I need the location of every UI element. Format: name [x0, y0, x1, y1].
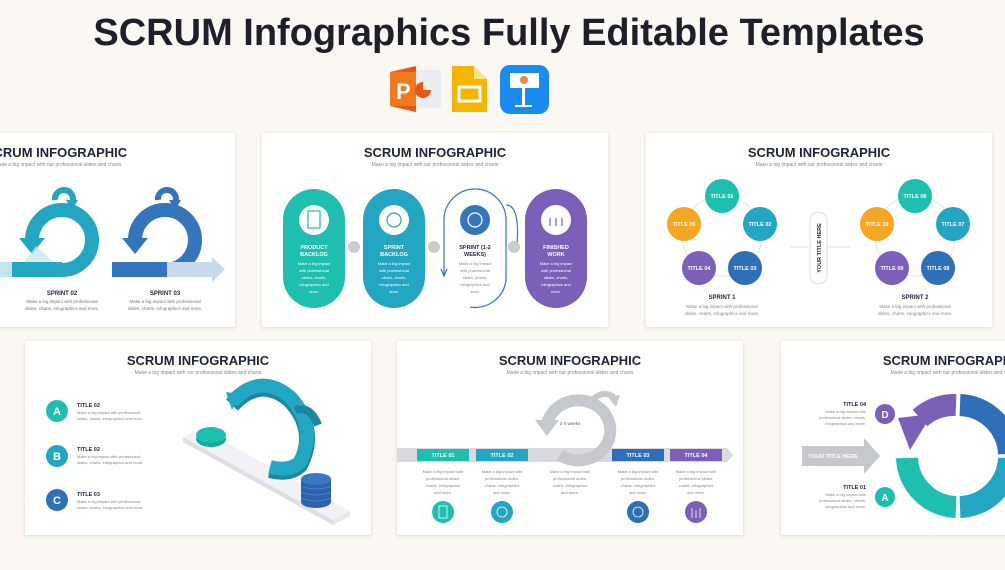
- icon: google slides: [452, 66, 487, 112]
- panel: ring: TITLE 01: [843, 485, 866, 491]
- list A B C: Make a big impact with professional: [77, 410, 140, 415]
- panel: sprint cycles: slides, charts, infographics and more.: [878, 311, 952, 316]
- panel: sprint cycles: Make a big impact with professional: [879, 304, 951, 309]
- cycle: sprint 1: TITLE 05: [673, 222, 695, 228]
- cycle: sprint 2: TITLE 06: [904, 194, 926, 200]
- descriptions: and more.: [561, 490, 579, 495]
- cycle: sprint 2: TITLE 10: [866, 222, 888, 228]
- panel: ring: [781, 341, 1005, 535]
- descriptions: and more.: [629, 490, 647, 495]
- pill: sprint outline: Make a big impact: [459, 261, 492, 266]
- labels: TITLE 02: [491, 453, 513, 459]
- descriptions: Make a big impact with: [482, 469, 522, 474]
- panel: sprint arrows: slides, charts, infographics and more.: [128, 306, 202, 311]
- panel: sprint cycles: slides, charts, infographics and more.: [685, 311, 759, 316]
- descriptions: professional slides,: [485, 476, 519, 481]
- descriptions: Make a big impact with: [423, 469, 463, 474]
- pill: sprint backlog: SPRINT: [384, 245, 405, 251]
- list A B C: Make a big impact with professional: [77, 454, 140, 459]
- panel: isometric: SCRUM INFOGRAPHIC: [127, 353, 270, 368]
- panel: timeline: Make a big impact with our professional slides and charts: [507, 370, 634, 376]
- panel: sprint arrows: Make a big impact with professional: [26, 299, 98, 304]
- pill: finished work: infographics and: [541, 282, 571, 287]
- pill: sprint backlog: with professional: [379, 268, 409, 273]
- list A B C: TITLE 02: [77, 447, 100, 453]
- pill: product backlog: slides, charts,: [302, 275, 326, 280]
- panel: sprint cycles: SPRINT 1: [708, 295, 736, 301]
- panel: ring: Make a big impact with: [825, 409, 866, 414]
- cycle: sprint 1: TITLE 02: [749, 222, 771, 228]
- panel: backlog pills: Make a big impact with our professional slides and charts: [372, 162, 499, 168]
- panel: sprint cycles: SPRINT 2: [901, 295, 929, 301]
- pill: sprint outline: more.: [470, 289, 480, 294]
- list A B C: A: [53, 406, 61, 418]
- descriptions: and more.: [687, 490, 705, 495]
- pill: finished work: with professional: [541, 268, 571, 273]
- pill: finished work: FINISHED: [543, 245, 569, 251]
- descriptions: Make a big impact with: [676, 469, 716, 474]
- labels: TITLE 01: [432, 453, 454, 459]
- panel: backlog pills: SCRUM INFOGRAPHIC: [364, 145, 507, 160]
- descriptions: professional slides,: [621, 476, 655, 481]
- panel: sprint arrows: [0, 133, 235, 327]
- cycle: sprint 2: TITLE 07: [942, 222, 964, 228]
- arrows between pills: [348, 241, 520, 253]
- app icons: [390, 65, 549, 114]
- list A B C: slides, charts, infographics and more.: [77, 505, 143, 510]
- icons: [432, 501, 707, 523]
- descriptions: professional slides,: [679, 476, 713, 481]
- cycle: sprint 2: [860, 179, 970, 285]
- pill: finished work: [525, 189, 587, 308]
- cycle: sprint 2: TITLE 09: [881, 266, 903, 272]
- D and A labels: [875, 404, 895, 424]
- list A B C: slides, charts, infographics and more.: [77, 416, 143, 421]
- sprint 02 loop: 2-4 weeks: [52, 236, 73, 241]
- center pill: [810, 212, 827, 284]
- sprint 02 loop: [12, 190, 92, 277]
- cycle: sprint 1: TITLE 03: [734, 266, 756, 272]
- pill: sprint outline: [441, 189, 518, 307]
- list A B C: slides, charts, infographics and more.: [77, 460, 143, 465]
- icon: keynote: [500, 65, 549, 114]
- ring segments: [907, 405, 1005, 507]
- pill: finished work: more.: [551, 289, 561, 294]
- list A B C: C: [53, 495, 61, 507]
- pill: sprint outline: with professional: [460, 268, 490, 273]
- pill: finished work: WORK: [547, 252, 565, 258]
- pill: sprint outline: infographics and: [460, 282, 490, 287]
- pill: sprint backlog: infographics and: [379, 282, 409, 287]
- labels: TITLE 04: [685, 453, 708, 459]
- list A B C: TITLE 03: [77, 492, 100, 498]
- pill: sprint outline: WEEKS): [464, 252, 486, 258]
- pill: product backlog: PRODUCT: [300, 245, 328, 251]
- gray loop + bar: 2-4 weeks: [560, 421, 581, 426]
- descriptions: and more.: [434, 490, 452, 495]
- cycle: sprint 1: TITLE 01: [711, 194, 733, 200]
- pill: sprint outline: slides, charts,: [463, 275, 487, 280]
- panel: sprint cycles: Make a big impact with professional: [686, 304, 758, 309]
- panel: sprint cycles: [646, 133, 992, 327]
- pill: finished work: Make a big impact: [540, 261, 573, 266]
- pill: product backlog: infographics and: [299, 282, 329, 287]
- list A B C: TITLE 02: [77, 403, 100, 409]
- gray loop + bar: [397, 394, 733, 462]
- descriptions: [423, 469, 716, 495]
- panel: sprint cycles: SCRUM INFOGRAPHIC: [748, 145, 891, 160]
- panel: sprint arrows: slides, charts, infographics and more.: [25, 306, 99, 311]
- panel: sprint arrows: Make a big impact with professional: [129, 299, 201, 304]
- icon: powerpoint: [390, 66, 441, 112]
- pill: product backlog: with professional: [299, 268, 329, 273]
- pill: sprint backlog: Make a big impact: [378, 261, 411, 266]
- cycle: sprint 2: TITLE 08: [927, 266, 949, 272]
- pill: sprint backlog: BACKLOG: [380, 252, 408, 258]
- gray arrow: YOUR TITLE HERE: [808, 454, 858, 460]
- labels: TITLE 03: [627, 453, 649, 459]
- center pill: YOUR TITLE HERE: [817, 223, 823, 273]
- panel: ring: infographics and more.: [825, 421, 866, 426]
- pill: product backlog: [283, 189, 345, 308]
- panel: backlog pills: [262, 133, 608, 327]
- list A B C: B: [53, 451, 61, 463]
- panel: ring: professional slides, charts,: [819, 415, 866, 420]
- pill: sprint backlog: more.: [389, 289, 399, 294]
- pill: product backlog: Make a big impact: [298, 261, 331, 266]
- list A B C: Make a big impact with professional: [77, 499, 140, 504]
- cycle: sprint 1: [667, 179, 777, 285]
- title: SCRUM Infographics Fully Editable Templates: [93, 12, 925, 54]
- pill: sprint backlog: slides, charts,: [382, 275, 406, 280]
- pill: product backlog: more.: [309, 289, 319, 294]
- descriptions: charts, infographics: [679, 483, 713, 488]
- panel: timeline: [397, 341, 743, 535]
- isometric scrum graphic: [183, 386, 350, 525]
- descriptions: charts, infographics: [426, 483, 460, 488]
- sprint labels: SPRINT 02: [47, 291, 78, 297]
- panel: isometric: Make a big impact with our professional slides and charts: [135, 370, 262, 376]
- cycle: sprint 1: TITLE 04: [688, 266, 711, 272]
- descriptions: charts, infographics: [621, 483, 655, 488]
- labels: [417, 449, 722, 461]
- descriptions: professional slides,: [426, 476, 460, 481]
- descriptions: professional slides,: [553, 476, 587, 481]
- panel: ring: TITLE 04: [843, 402, 867, 408]
- panel: timeline: SCRUM INFOGRAPHIC: [499, 353, 642, 368]
- panel: sprint arrows: SPRINT 03: [150, 291, 181, 297]
- panel: ring: D: [881, 410, 889, 421]
- pill: finished work: slides, charts,: [544, 275, 568, 280]
- panel: ring: professional slides, charts,: [819, 498, 866, 503]
- panel: sprint cycles: Make a big impact with our professional slides and charts: [756, 162, 883, 168]
- pill: product backlog: BACKLOG: [300, 252, 328, 258]
- panel: ring: Make a big impact with: [825, 492, 866, 497]
- pill: sprint outline: SPRINT (1-2: [459, 245, 491, 251]
- panel: isometric: [25, 341, 371, 535]
- descriptions: charts, infographics: [553, 483, 587, 488]
- descriptions: and more.: [493, 490, 511, 495]
- sprint 03 loop: [112, 190, 225, 282]
- gray arrow: [802, 438, 880, 474]
- panel: ring: A: [881, 493, 889, 504]
- descriptions: Make a big impact with: [618, 469, 658, 474]
- sprint 03 loop: 2-4 weeks: [155, 236, 176, 241]
- icon: powerpoint: P: [396, 79, 411, 104]
- descriptions: charts, infographics: [485, 483, 519, 488]
- pill: sprint backlog: [363, 189, 425, 308]
- descriptions: Make a big impact with: [550, 469, 590, 474]
- list A B C: [46, 400, 143, 511]
- panel: ring: infographics and more.: [825, 504, 866, 509]
